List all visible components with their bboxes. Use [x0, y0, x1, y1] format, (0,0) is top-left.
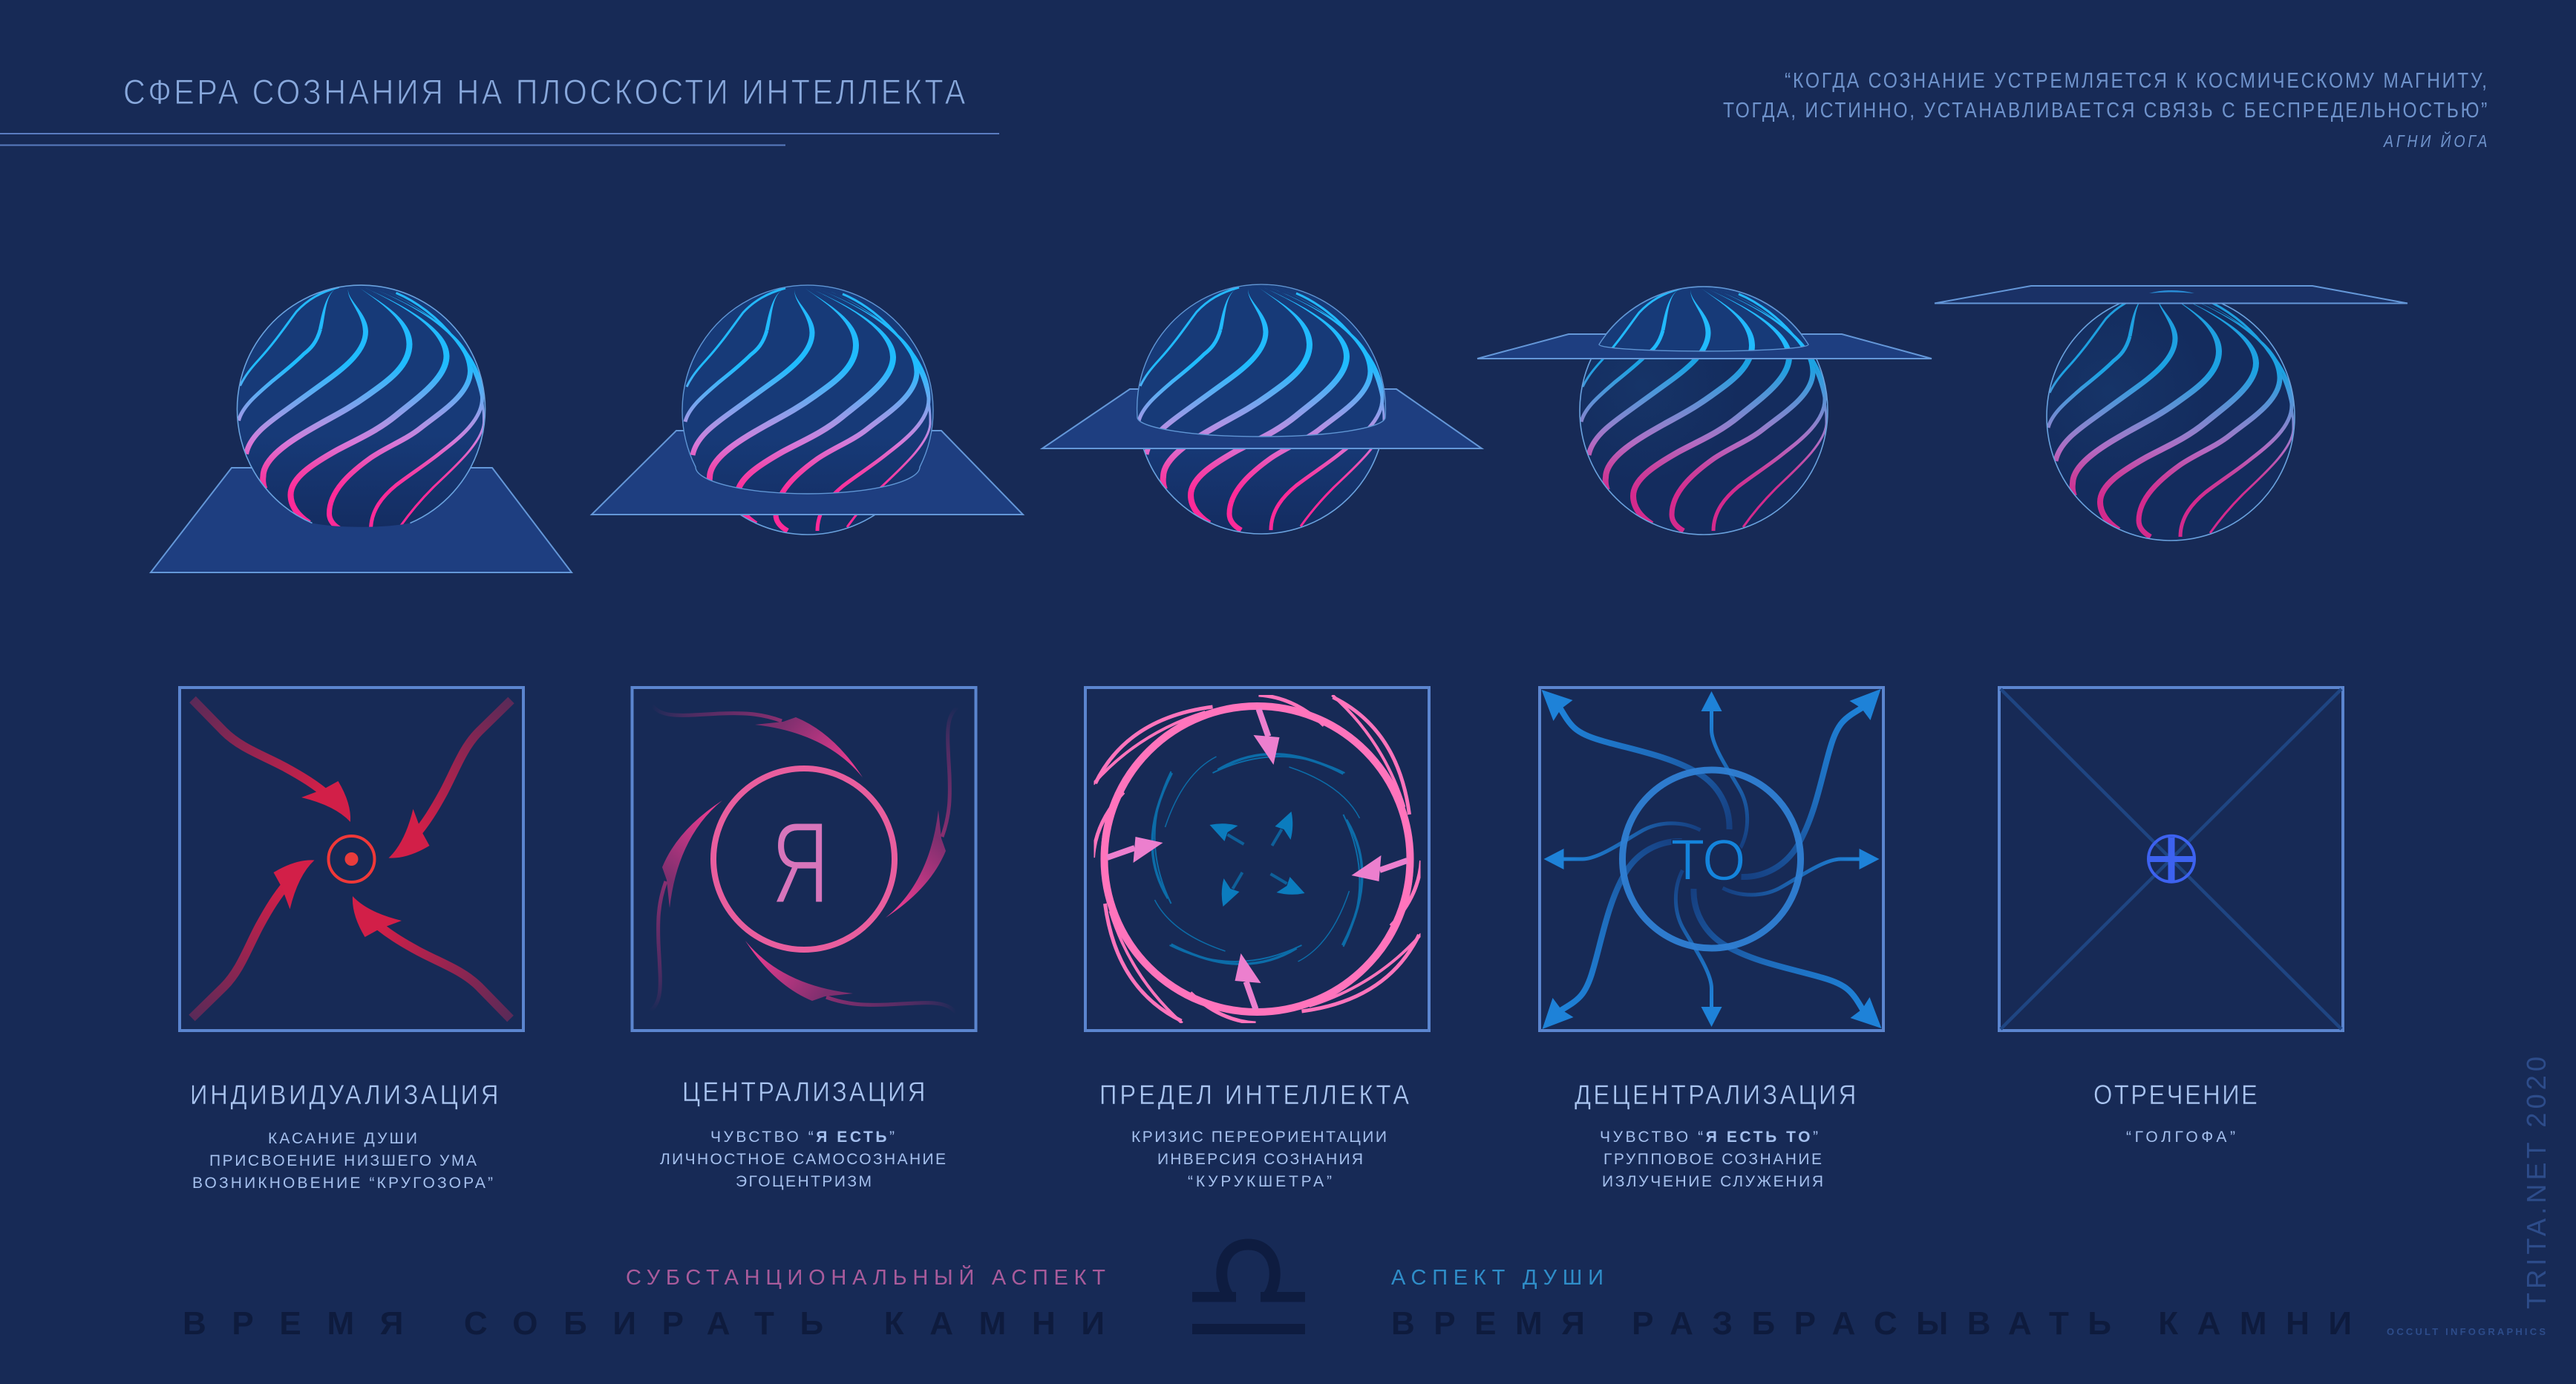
heading and text: column 4: ИЗЛУЧЕНИЕ СЛУЖЕНИЯ: [1602, 1173, 1823, 1190]
heading and text: column 4: ДЕЦЕНТРАЛИЗАЦИЯ: [1575, 1080, 1856, 1110]
icon: circled cross: [2148, 836, 2194, 882]
heading and text: column 2: ЧУВСТВО “Я ЕСТЬ”: [710, 1129, 895, 1146]
panel: decentralization: [1540, 688, 1883, 1031]
heading and text: column 2: ЛИЧНОСТНОЕ САМОСОЗНАНИЕ: [660, 1151, 946, 1168]
ring: [1623, 770, 1801, 948]
heading and text: column 4: ГРУППОВОЕ СОЗНАНИЕ: [1604, 1151, 1822, 1168]
icon: circled point: [328, 836, 374, 882]
sphere stage 2: [592, 284, 1023, 537]
diagonals: [2001, 689, 2341, 1029]
caption: time to scatter stones: ВРЕМЯ РАЗБРАСЫВАТЬ КАМНИ: [1391, 1305, 2352, 1342]
heading and text: column 3: “КУРУКШЕТРА”: [1188, 1173, 1332, 1190]
heading and text: column 5: ОТРЕЧЕНИЕ: [2093, 1080, 2258, 1110]
heading and text: column 1: ВОЗНИКНОВЕНИЕ “КРУГОЗОРА”: [192, 1175, 493, 1192]
swirls: [650, 705, 958, 1013]
caption: soul aspect: АСПЕКТ ДУШИ: [1391, 1266, 1604, 1290]
arrows inward: [192, 699, 511, 1019]
quote: “КОГДА СОЗНАНИЕ УСТРЕМЛЯЕТСЯ К КОСМИЧЕСКОМУ МАГНИТУ,: [1785, 68, 2487, 92]
heading and text: column 2: [660, 1077, 946, 1190]
sphere stage 1: [151, 285, 572, 572]
ring: [713, 768, 895, 950]
heading and text: column 4: ЧУВСТВО “Я ЕСТЬ ТО”: [1600, 1129, 1818, 1146]
credit: small: OCCULT INFOGRAPHICS: [2387, 1326, 2546, 1337]
sphere stage 5: [1935, 286, 2407, 541]
heading and text: column 1: ПРИСВОЕНИЕ НИЗШЕГО УМА: [209, 1152, 477, 1169]
panel: individualization: [180, 688, 523, 1031]
inner arrows: [1210, 812, 1305, 907]
heading and text: column 3: [1099, 1080, 1410, 1190]
heading and text: column 2: ЦЕНТРАЛИЗАЦИЯ: [682, 1077, 925, 1107]
arrows outward: [1541, 689, 1881, 1029]
outer ring and arcs: [1094, 695, 1421, 1023]
panel: limit of intellect: [1084, 686, 1431, 1032]
panel: renunciation: [1999, 688, 2343, 1031]
word: ТО: [1670, 827, 1746, 892]
letter: Я: [771, 798, 829, 928]
heading and text: column 5: “ГОЛГОФА”: [2126, 1129, 2235, 1146]
pink arrows: [1108, 709, 1408, 1009]
heading and text: column 5: [2093, 1080, 2258, 1146]
quote: [1723, 68, 2487, 151]
sphere stage 3: [1042, 284, 1482, 535]
credit: vertical: TRITA.NET 2020: [2521, 1057, 2552, 1309]
heading and text: column 3: ПРЕДЕЛ ИНТЕЛЛЕКТА: [1099, 1080, 1410, 1110]
heading and text: column 2: ЭГОЦЕНТРИЗМ: [736, 1173, 872, 1190]
heading and text: column 1: [190, 1080, 498, 1192]
heading and text: column 1: КАСАНИЕ ДУШИ: [268, 1130, 417, 1147]
sphere stage 4: [1477, 286, 1932, 535]
quote: АГНИ ЙОГА: [2382, 130, 2487, 151]
icon: libra: [1192, 1244, 1305, 1334]
quote: ТОГДА, ИСТИННО, УСТАНАВЛИВАЕТСЯ СВЯЗЬ С БЕСПРЕДЕЛЬНОСТЬЮ”: [1723, 98, 2487, 122]
caption: time to gather stones: ВРЕМЯ СОБИРАТЬ КАМНИ: [183, 1305, 1105, 1342]
heading and text: column 3: ИНВЕРСИЯ СОЗНАНИЯ: [1157, 1151, 1363, 1168]
caption: substantial aspect: СУБСТАНЦИОНАЛЬНЫЙ АСПЕКТ: [626, 1264, 1105, 1290]
heading and text: column 4: [1575, 1080, 1856, 1190]
panel: centralization: [632, 688, 975, 1031]
heading and text: column 3: КРИЗИС ПЕРЕОРИЕНТАЦИИ: [1131, 1129, 1387, 1146]
title: СФЕРА СОЗНАНИЯ НА ПЛОСКОСТИ ИНТЕЛЛЕКТА: [123, 74, 966, 112]
heading and text: column 1: ИНДИВИДУАЛИЗАЦИЯ: [190, 1080, 498, 1110]
